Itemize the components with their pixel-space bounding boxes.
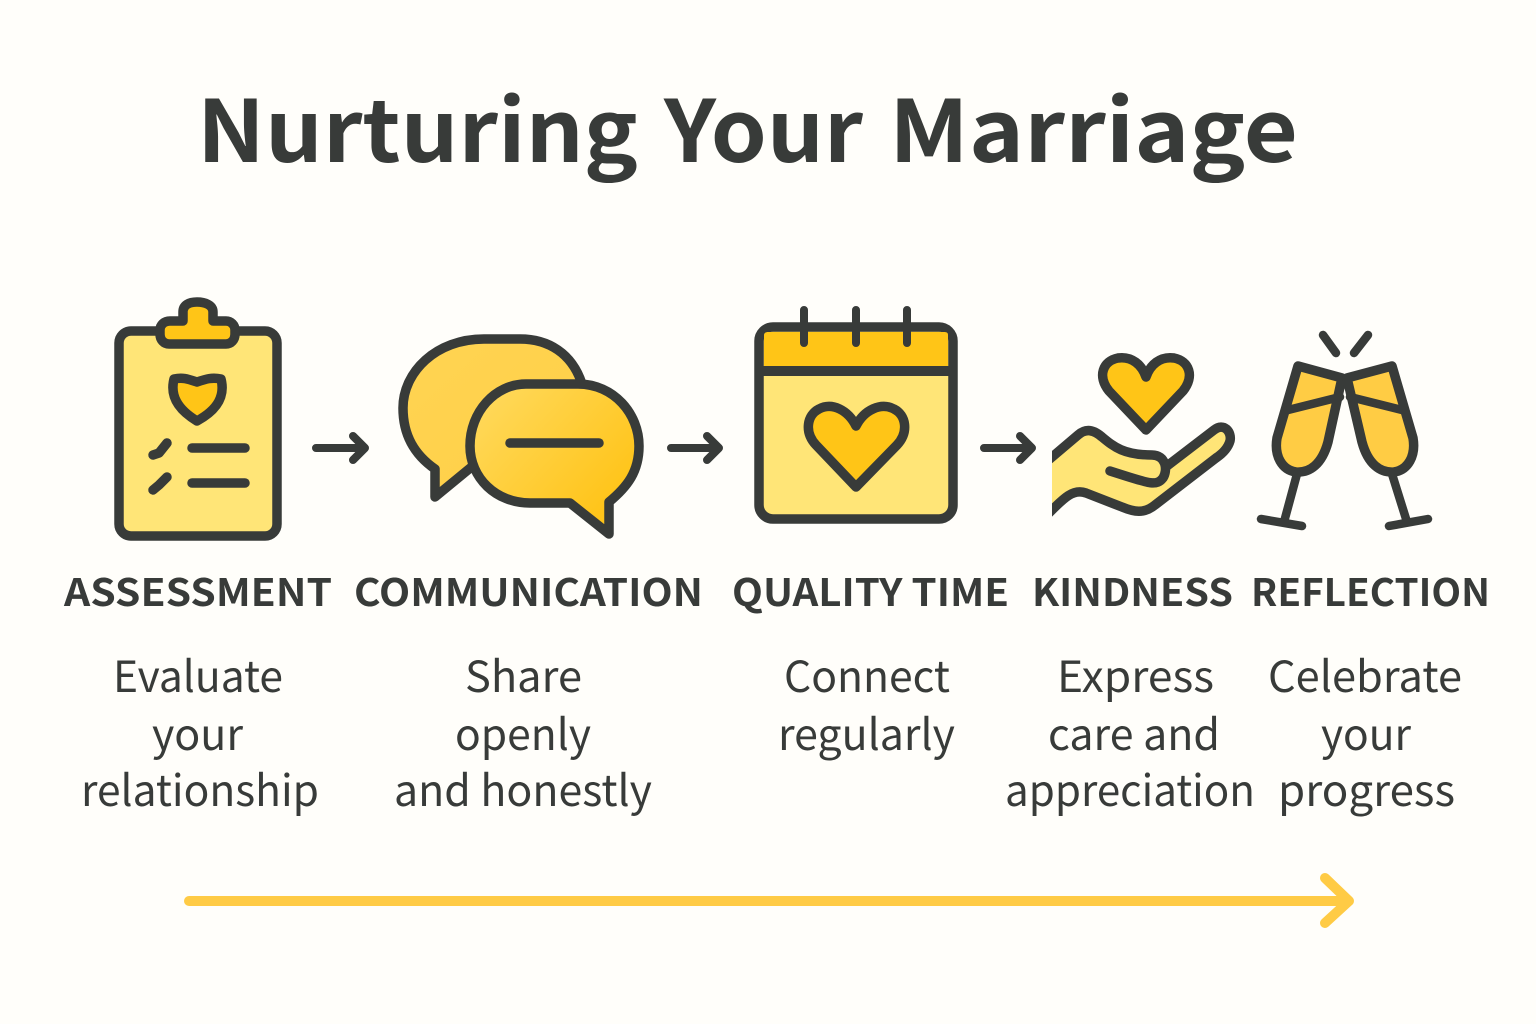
title: Marriage [889, 62, 1298, 187]
step: communication: Share [465, 643, 582, 705]
step: reflection: Celebrate [1268, 643, 1462, 705]
step: assessment: ASSESSMENT [63, 562, 332, 617]
step: reflection: REFLECTION [1251, 562, 1490, 617]
step: kindness [1005, 562, 1255, 819]
step: communication: COMMUNICATION [354, 562, 703, 617]
step: communication: and honestly [394, 757, 652, 819]
step: assessment: relationship [81, 757, 319, 819]
step: kindness: Express [1057, 643, 1214, 705]
step: quality time [732, 562, 1009, 763]
title: Nurturing [197, 62, 638, 187]
icon: hand holding heart [1045, 358, 1230, 517]
step: reflection: your [1321, 701, 1411, 763]
step: quality time: Connect [784, 643, 950, 705]
step: quality time: QUALITY TIME [732, 562, 1009, 617]
icon: calendar with heart [759, 310, 953, 519]
title: Your [663, 62, 864, 187]
step: assessment: Evaluate [113, 643, 283, 705]
arrow: assessment to communication [316, 436, 365, 460]
step: assessment [63, 562, 332, 819]
step: communication [354, 562, 703, 819]
title [197, 62, 1298, 187]
icon: clipboard [119, 302, 277, 536]
step: reflection: progress [1278, 757, 1455, 819]
step: communication: openly [455, 701, 591, 763]
step: kindness: appreciation [1005, 757, 1255, 819]
step: kindness: KINDNESS [1032, 562, 1233, 617]
icon: champagne glasses [1261, 335, 1428, 526]
step: assessment: your [152, 701, 243, 763]
step: quality time: regularly [778, 701, 955, 763]
step: reflection [1251, 562, 1490, 819]
arrow: quality time to kindness [984, 436, 1032, 460]
arrow: communication to quality time [671, 436, 719, 460]
step: kindness: care and [1048, 701, 1220, 763]
icon: chat bubbles [403, 339, 639, 534]
progress arrow [189, 878, 1349, 923]
